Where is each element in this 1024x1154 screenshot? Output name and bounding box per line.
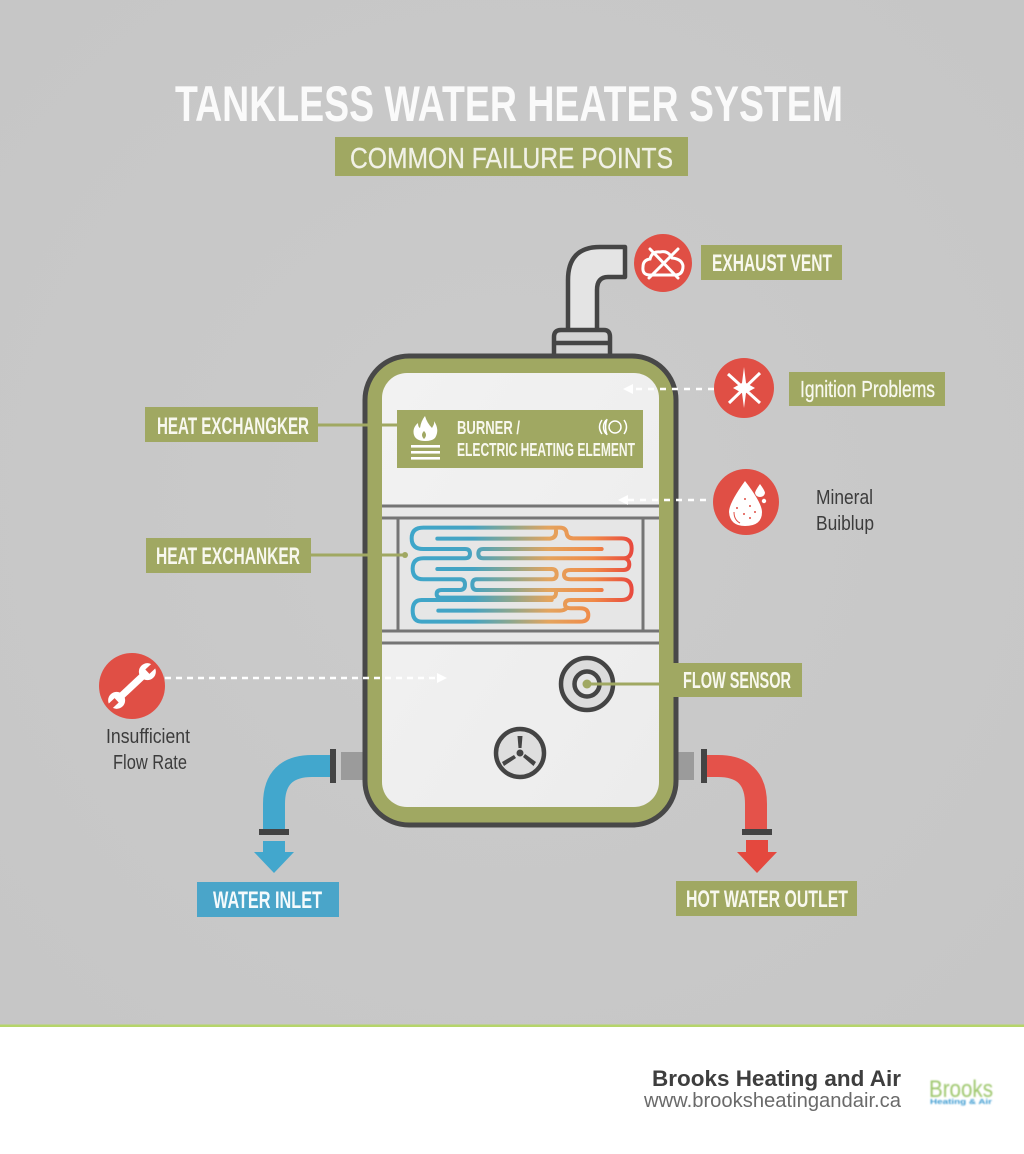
label: mineral buildup: Mineral bbox=[816, 487, 873, 509]
leader: heat exchangker bbox=[318, 424, 397, 426]
leader: flow sensor bbox=[587, 682, 673, 686]
label: flow sensor bbox=[673, 663, 802, 697]
hot water outlet pipe bbox=[677, 749, 777, 873]
arrow: insufficient flow bbox=[165, 673, 447, 683]
icon: wrench bbox=[99, 653, 165, 719]
label: mineral buildup bbox=[816, 487, 874, 535]
label: exhaust vent bbox=[701, 245, 842, 280]
heater body bbox=[365, 356, 676, 825]
label: mineral buildup: Buiblup bbox=[816, 513, 874, 535]
leader: heat exchanker bbox=[311, 552, 408, 558]
exhaust vent pipe bbox=[554, 247, 625, 356]
label: water inlet bbox=[197, 882, 339, 917]
logo: Brooks bbox=[929, 1076, 993, 1103]
logo: Heating & Air bbox=[930, 1099, 992, 1106]
icon: mineral drop bbox=[713, 469, 779, 535]
flow sensor dial bbox=[561, 658, 613, 710]
heating coil bbox=[412, 528, 632, 622]
icon: flame bbox=[411, 416, 440, 460]
label: water inlet: WATER INLET bbox=[213, 887, 322, 914]
footer bbox=[0, 1024, 1024, 1154]
label: ignition problems bbox=[789, 372, 945, 406]
label: hot water outlet bbox=[676, 881, 857, 916]
icon: heating waves bbox=[600, 419, 626, 435]
label: ignition problems: Ignition Problems bbox=[800, 376, 935, 402]
burner label panel bbox=[397, 410, 643, 468]
fan bbox=[496, 729, 544, 777]
label: insufficient flow rate: Insufficient bbox=[106, 726, 190, 748]
arrow: ignition bbox=[623, 384, 714, 394]
arrow: mineral bbox=[618, 495, 706, 505]
burner label panel: BURNER / bbox=[457, 418, 520, 438]
label: insufficient flow rate: Flow Rate bbox=[113, 752, 187, 774]
label: heat exchanker: HEAT EXCHANKER bbox=[156, 543, 300, 570]
water inlet pipe bbox=[254, 749, 363, 873]
label: exhaust vent: EXHAUST VENT bbox=[712, 250, 832, 277]
icon: exhaust failure bbox=[634, 234, 692, 292]
subtitle banner: COMMON FAILURE POINTS bbox=[350, 143, 673, 175]
burner label panel: ELECTRIC HEATING ELEMENT bbox=[457, 440, 635, 460]
label: heat exchangker: HEAT EXCHANGKER bbox=[157, 413, 309, 440]
label: heat exchangker bbox=[145, 407, 318, 442]
icon: ignition spark bbox=[714, 358, 774, 418]
label: heat exchanker bbox=[146, 538, 311, 573]
label: insufficient flow rate bbox=[106, 726, 190, 774]
heat exchanger chamber bbox=[382, 506, 659, 643]
website: www.brooksheatingandair.ca bbox=[643, 1090, 902, 1112]
label: flow sensor: FLOW SENSOR bbox=[683, 667, 791, 693]
company name: Brooks Heating and Air bbox=[652, 1066, 901, 1091]
label: hot water outlet: HOT WATER OUTLET bbox=[686, 886, 848, 913]
